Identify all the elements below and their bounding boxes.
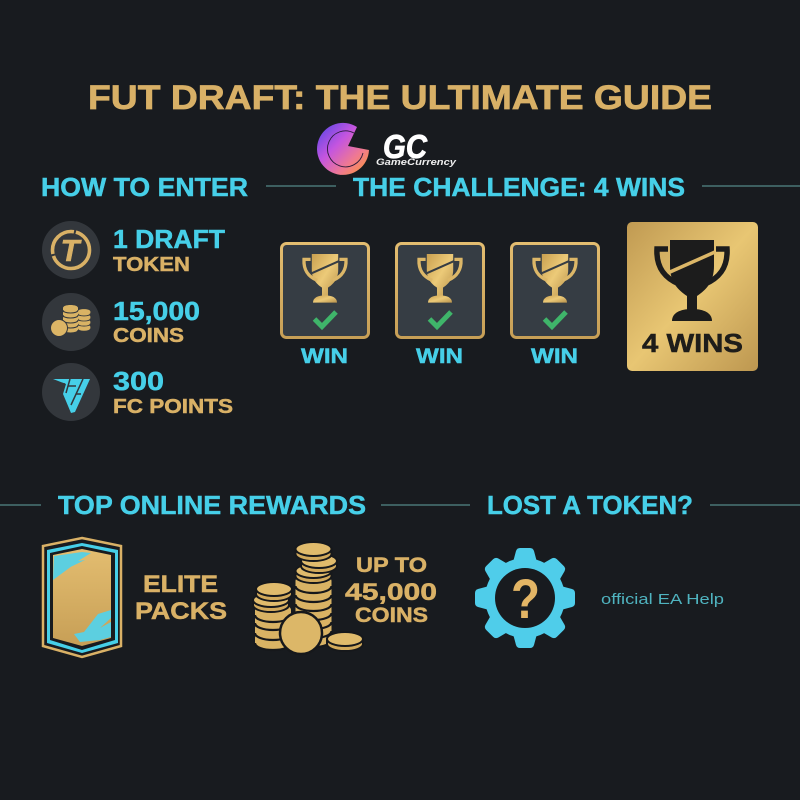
icon: FC bbox=[42, 363, 100, 421]
win card 2 bbox=[396, 244, 484, 368]
label: fc points: FC POINTS bbox=[113, 396, 233, 418]
logo: GameCurrency bbox=[317, 123, 457, 175]
text: official EA help: official EA Help bbox=[601, 591, 724, 608]
label: elite packs bbox=[135, 571, 227, 625]
heading: top online rewards: TOP ONLINE REWARDS bbox=[58, 490, 366, 520]
label: coins: COINS bbox=[113, 325, 184, 347]
logo wordmark: GameCurrency bbox=[376, 157, 457, 167]
item: fc points bbox=[42, 363, 233, 421]
panel: the challenge bbox=[282, 172, 758, 371]
win card 3: WIN bbox=[531, 345, 578, 368]
label: up to 45,000 coins: UP TO bbox=[356, 554, 427, 577]
label: 300: 300 bbox=[113, 366, 164, 396]
logo wordmark: GC bbox=[383, 128, 428, 165]
heading: the challenge: THE CHALLENGE: 4 WINS bbox=[353, 172, 685, 202]
icon: elite pack bbox=[43, 538, 121, 657]
label: 15,000: 15,000 bbox=[113, 296, 200, 326]
label: up to 45,000 coins: COINS bbox=[355, 604, 428, 627]
panel: how to enter bbox=[41, 172, 248, 421]
item: draft token bbox=[42, 221, 225, 279]
win card 2: WIN bbox=[416, 345, 463, 368]
heading: how to enter: HOW TO ENTER bbox=[41, 172, 248, 202]
title: FUT DRAFT: THE ULTIMATE GUIDE bbox=[88, 79, 712, 117]
icon: gear with question mark bbox=[475, 548, 575, 648]
label: up to 45,000 coins bbox=[345, 554, 437, 627]
gold card: 4 wins bbox=[627, 222, 758, 371]
gold card: 4 wins: 4 WINS bbox=[642, 328, 743, 358]
win card 3 bbox=[512, 244, 598, 368]
icon: token bbox=[42, 221, 100, 279]
icon: coins bbox=[42, 293, 100, 351]
heading: lost a token: LOST A TOKEN? bbox=[487, 490, 693, 520]
label: up to 45,000 coins: 45,000 bbox=[345, 579, 437, 606]
label: 1 draft: 1 DRAFT bbox=[113, 224, 225, 254]
win card 1 bbox=[282, 244, 368, 368]
win card 1: WIN bbox=[301, 345, 348, 368]
label: elite packs: ELITE bbox=[143, 571, 218, 598]
icon: gear with question mark: ? bbox=[511, 567, 540, 630]
item: coins bbox=[42, 293, 200, 351]
panel: lost a token bbox=[475, 490, 724, 648]
panel: top online rewards bbox=[43, 490, 437, 657]
label: token: TOKEN bbox=[113, 254, 190, 276]
icon: token: T bbox=[61, 233, 83, 268]
logo wordmark bbox=[376, 128, 457, 167]
icon: coin stacks bbox=[253, 542, 363, 654]
label: elite packs: PACKS bbox=[135, 598, 227, 625]
logo mark bbox=[317, 123, 369, 175]
